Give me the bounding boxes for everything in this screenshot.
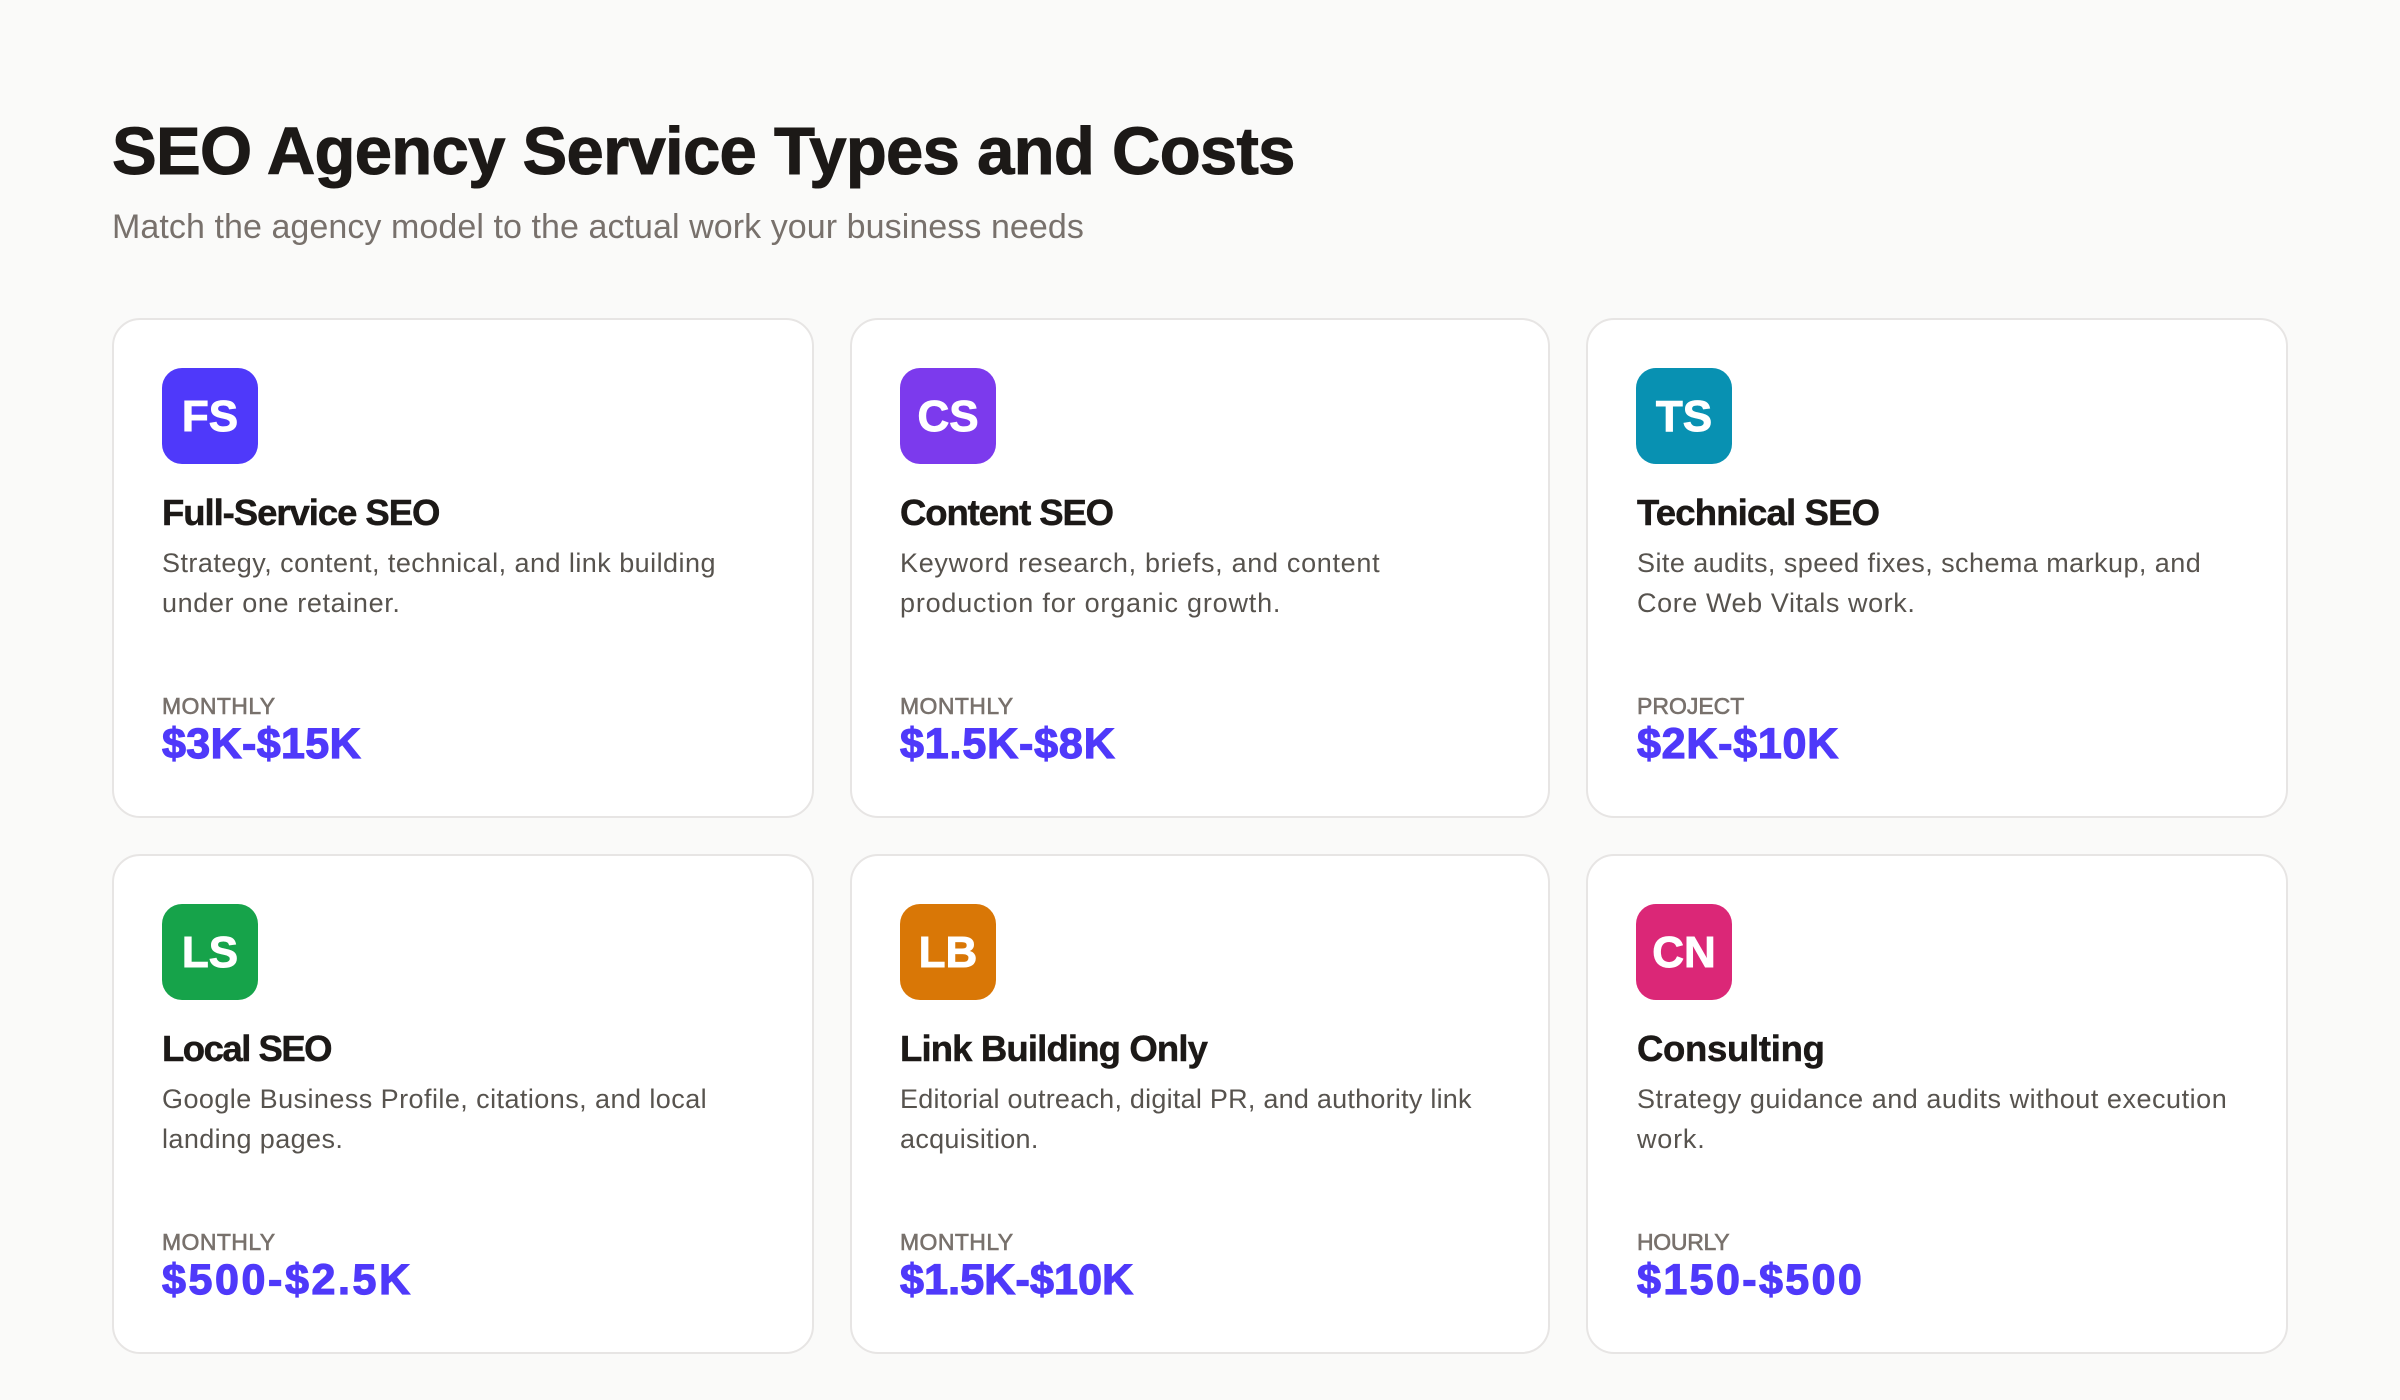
- billing label: MONTHLY: [900, 1229, 1014, 1255]
- heading: Content SEO: Content SEO: [900, 492, 1113, 533]
- price: $500-$2.5K: [162, 1256, 413, 1304]
- description: production for organic growth.: [900, 588, 1281, 618]
- price: $150-$500: [1637, 1256, 1864, 1304]
- heading: Full-Service SEO: Full-Service SEO: [162, 492, 439, 533]
- icon: TS: [1636, 368, 1732, 464]
- description: [900, 1084, 1472, 1154]
- description: Editorial outreach, digital PR, and authority link: [900, 1084, 1472, 1114]
- panel: Consulting: [1586, 854, 2288, 1354]
- description: Strategy guidance and audits without execution: [1637, 1084, 2227, 1114]
- billing label: MONTHLY: [900, 693, 1014, 719]
- panel: Technical SEO: [1586, 318, 2288, 818]
- icon: LB: LB: [919, 928, 977, 977]
- description: [162, 1084, 707, 1154]
- panel: Full-Service SEO: [112, 318, 814, 818]
- heading: Consulting: Consulting: [1637, 1028, 1825, 1069]
- icon: FS: FS: [182, 392, 238, 441]
- description: Site audits, speed fixes, schema markup, and: [1637, 548, 2201, 578]
- panel: Content SEO: [850, 318, 1550, 818]
- description: landing pages.: [162, 1124, 343, 1154]
- price: $2K-$10K: [1637, 720, 1839, 768]
- description: acquisition.: [900, 1124, 1039, 1154]
- heading: Link Building Only: Link Building Only: [900, 1028, 1207, 1069]
- heading: Technical SEO: Technical SEO: [1637, 492, 1879, 533]
- description: Google Business Profile, citations, and local: [162, 1084, 707, 1114]
- description: under one retainer.: [162, 588, 400, 618]
- icon: CN: CN: [1652, 928, 1716, 977]
- billing label: PROJECT: [1637, 693, 1744, 719]
- description: Core Web Vitals work.: [1637, 588, 1916, 618]
- icon: FS: [162, 368, 258, 464]
- icon: LS: [162, 904, 258, 1000]
- panel: Link Building Only: [850, 854, 1550, 1354]
- icon: CN: [1636, 904, 1732, 1000]
- price: $1.5K-$8K: [900, 720, 1116, 768]
- title: SEO Agency Service Types and Costs: [112, 114, 1295, 189]
- description: Strategy, content, technical, and link building: [162, 548, 716, 578]
- description: Keyword research, briefs, and content: [900, 548, 1380, 578]
- description: [1637, 548, 2201, 618]
- billing label: MONTHLY: [162, 693, 276, 719]
- billing label: HOURLY: [1637, 1229, 1729, 1255]
- icon: TS: TS: [1656, 392, 1712, 441]
- icon: LB: [900, 904, 996, 1000]
- description: [1637, 1084, 2227, 1154]
- subtitle: Match the agency model to the actual work your business needs: [112, 208, 1084, 246]
- panel: Local SEO: [112, 854, 814, 1354]
- billing label: MONTHLY: [162, 1229, 276, 1255]
- icon: LS: LS: [182, 928, 238, 977]
- price: $3K-$15K: [162, 720, 361, 768]
- price: $1.5K-$10K: [900, 1256, 1133, 1304]
- description: [900, 548, 1380, 618]
- description: [162, 548, 716, 618]
- heading: Local SEO: Local SEO: [162, 1028, 331, 1069]
- icon: CS: CS: [917, 392, 979, 441]
- description: work.: [1637, 1124, 1706, 1154]
- icon: CS: [900, 368, 996, 464]
